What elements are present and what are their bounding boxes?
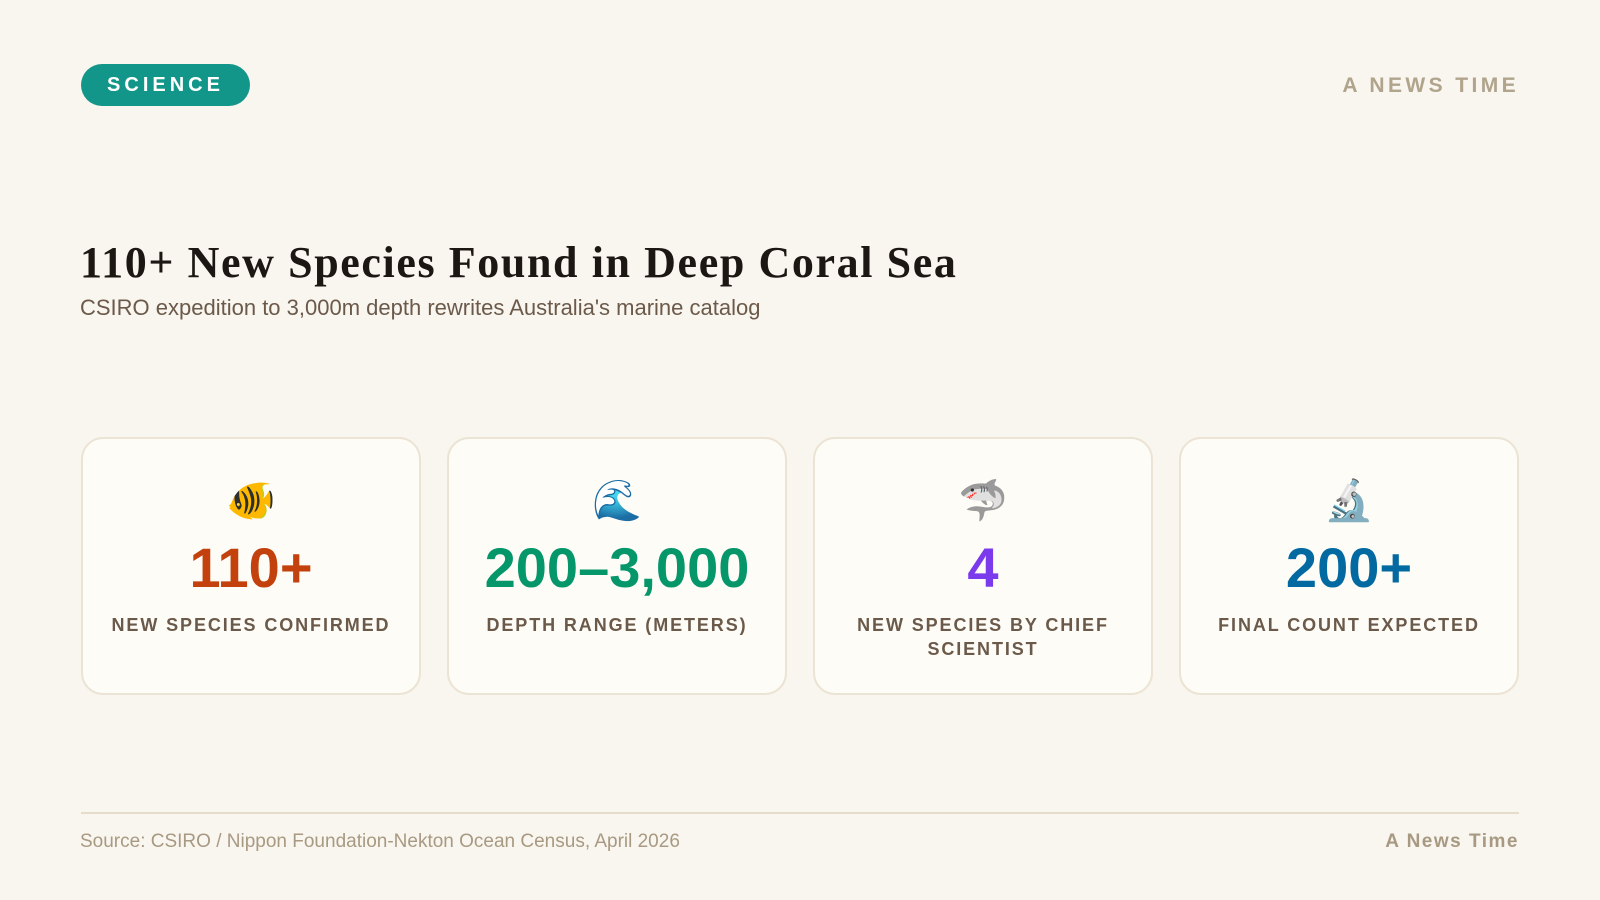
stat: 4: 4 [967, 536, 999, 599]
title: 110+ New Species Found in Deep Coral Sea [80, 238, 957, 287]
card: depth range [447, 437, 787, 695]
label: NEW SPECIES CONFIRMED [112, 615, 390, 635]
subtitle: CSIRO expedition to 3,000m depth rewrites Australia's marine catalog [80, 295, 760, 320]
icon: wave: 🌊 [592, 477, 642, 524]
icon: fish: 🐠 [226, 477, 276, 524]
stat: depth: 200–3,000 [485, 536, 749, 599]
card: chief scientist [813, 437, 1153, 695]
icon: microscope: 🔬 [1324, 477, 1374, 524]
source note: Source: CSIRO / Nippon Foundation-Nekton Ocean Census, April 2026 [80, 831, 680, 852]
label: FINAL COUNT EXPECTED [1218, 615, 1480, 635]
tag: science: SCIENCE [107, 74, 224, 96]
stat: 110+: 110+ [189, 536, 313, 599]
stat: 200+: 200+ [1286, 536, 1412, 599]
brand header: A NEWS TIME [1342, 74, 1519, 97]
label: NEW SPECIES BY CHIEF SCIENTIST [857, 615, 1109, 659]
footer brand: A News Time [1385, 831, 1519, 852]
icon: shark: 🦈 [958, 477, 1008, 524]
card: new species [81, 437, 421, 695]
tag: science [81, 64, 250, 106]
label: DEPTH RANGE (METERS) [486, 615, 748, 635]
card: final count [1179, 437, 1519, 695]
